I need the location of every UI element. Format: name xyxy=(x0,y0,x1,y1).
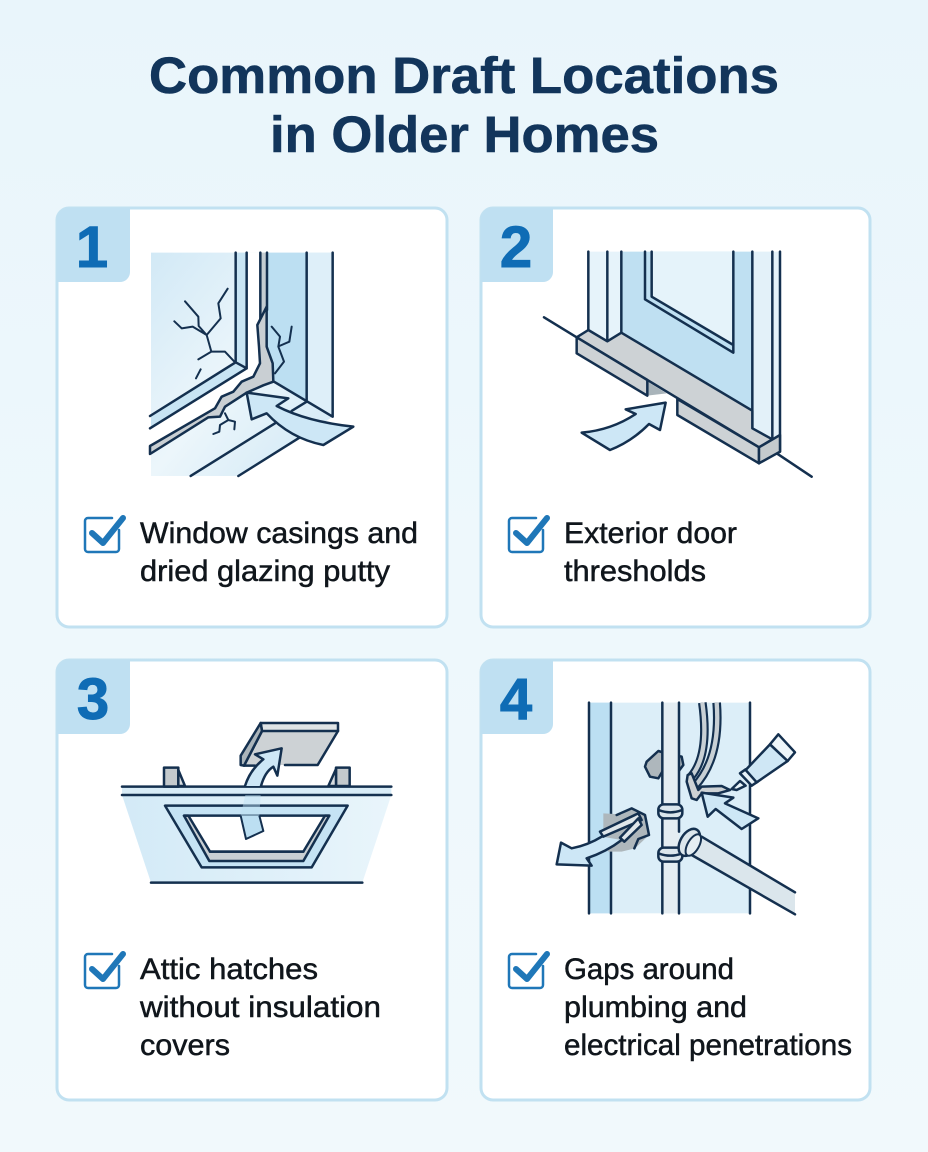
label: Window casings and xyxy=(140,517,418,550)
branch pipe xyxy=(685,832,795,914)
checkbox xyxy=(509,954,547,988)
number badge 4 xyxy=(481,660,553,734)
title: Common Draft Locations xyxy=(149,47,779,104)
illustration: pipe and wire penetrations in a wall xyxy=(557,703,795,914)
sealant blob behind pipe xyxy=(645,751,683,778)
number badge 2: 2 xyxy=(500,215,532,280)
gray crack xyxy=(150,307,273,454)
number badge 1: 1 xyxy=(76,215,108,280)
label: Attic hatches xyxy=(140,953,318,986)
number badge 1 xyxy=(57,208,130,282)
panel: attic hatches xyxy=(57,660,447,1100)
vertical pipe xyxy=(662,703,679,913)
wires xyxy=(691,703,717,787)
label: Gaps around xyxy=(564,953,734,986)
panel: door thresholds xyxy=(481,208,870,627)
draft arrow xyxy=(241,748,282,839)
number badge 3: 3 xyxy=(77,667,109,732)
label xyxy=(139,953,381,1062)
checkbox xyxy=(85,518,123,552)
number badge 4: 4 xyxy=(500,667,532,732)
checkbox xyxy=(85,954,123,988)
label: thresholds xyxy=(564,555,706,588)
number badge 2 xyxy=(481,208,553,282)
hatch cover xyxy=(244,731,338,765)
label: dried glazing putty xyxy=(140,555,390,588)
title xyxy=(149,47,779,163)
label: without insulation xyxy=(139,991,381,1024)
left gap xyxy=(603,808,649,852)
panel: window casings xyxy=(57,208,447,627)
illustration: door threshold with draft arrow xyxy=(544,252,812,477)
label xyxy=(140,517,418,588)
label: electrical penetrations xyxy=(564,1029,852,1062)
draft arrow xyxy=(582,403,666,450)
draft arrow xyxy=(247,393,353,445)
illustration: attic hatch with lifted cover xyxy=(122,723,391,883)
wire stubs xyxy=(600,813,642,842)
title: in Older Homes xyxy=(270,106,659,163)
checkbox xyxy=(509,518,547,552)
label xyxy=(564,953,852,1062)
number badge 3 xyxy=(57,660,130,734)
draft arrow in xyxy=(702,793,758,829)
caulk tube xyxy=(732,734,795,790)
illustration: cracked window casing with draft arrow xyxy=(150,253,353,476)
label xyxy=(564,517,737,588)
label: Exterior door xyxy=(564,517,737,550)
pipe couplers xyxy=(658,804,704,862)
label: plumbing and xyxy=(564,991,747,1024)
draft arrow out xyxy=(557,837,622,866)
panel: plumbing and electrical penetrations xyxy=(481,660,870,1100)
label: covers xyxy=(140,1029,230,1062)
